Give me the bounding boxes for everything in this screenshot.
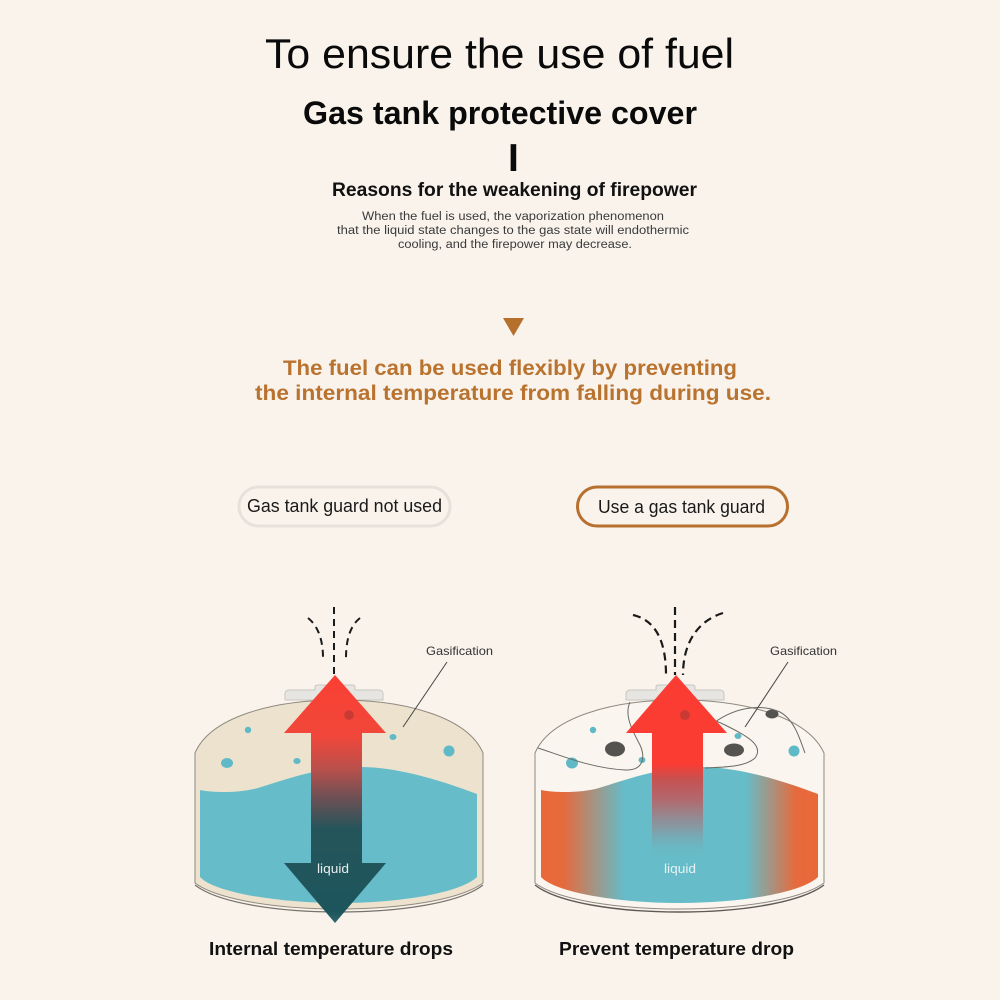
gasification leader xyxy=(745,662,788,727)
label: gasification: Gasification xyxy=(426,644,493,658)
pill: use a gas tank guard: Use a gas tank guard xyxy=(598,497,765,517)
pill: gas tank guard not used: Gas tank guard not used xyxy=(247,496,442,516)
caption: prevent temperature drop: Prevent temperature drop xyxy=(559,939,794,959)
subtitle: Gas tank protective cover xyxy=(303,95,697,131)
icon: down triangle xyxy=(503,318,524,336)
orange callout text: the internal temperature from falling during use. xyxy=(255,382,771,405)
gas bubbles xyxy=(566,727,800,768)
tank body xyxy=(195,700,483,909)
diagram: tank with guard xyxy=(535,607,837,912)
double arrow xyxy=(284,675,386,923)
liquid xyxy=(541,767,818,903)
gasification leader xyxy=(403,662,447,727)
label: gasification: Gasification xyxy=(770,644,837,658)
label: liquid: liquid xyxy=(317,862,349,876)
separator glyph: I xyxy=(508,137,519,180)
dark bubble in arrow xyxy=(680,710,690,720)
gas bubbles xyxy=(221,727,454,768)
tank cap xyxy=(626,685,724,700)
title: To ensure the use of fuel xyxy=(265,30,734,77)
heading: reasons: Reasons for the weakening of firepower xyxy=(332,180,698,201)
vapor dashes xyxy=(633,607,723,675)
dark bubble in arrow xyxy=(344,710,354,720)
explanatory text block: cooling, and the firepower may decrease. xyxy=(398,239,632,251)
caption: internal temperature drops: Internal temperature drops xyxy=(209,939,453,959)
vapor dashes xyxy=(308,607,360,675)
diagram: tank without guard xyxy=(195,607,493,923)
label: liquid: liquid xyxy=(664,862,696,876)
explanatory text block xyxy=(337,211,689,251)
dark gas particles xyxy=(605,710,778,756)
orange callout text: The fuel can be used flexibly by preventing xyxy=(283,357,737,380)
gas motion curves xyxy=(538,702,805,770)
orange callout text xyxy=(255,357,771,405)
pill: use a gas tank guard xyxy=(578,487,788,526)
up arrow xyxy=(626,675,727,860)
liquid xyxy=(200,767,477,903)
explanatory text block: When the fuel is used, the vaporization phenomenon xyxy=(362,211,664,223)
explanatory text block: that the liquid state changes to the gas state will endothermic xyxy=(337,225,689,237)
pill: gas tank guard not used xyxy=(239,487,450,526)
tank base rim xyxy=(195,885,483,912)
tank base rim xyxy=(535,885,824,912)
tank cap xyxy=(285,685,383,700)
tank body xyxy=(535,700,824,909)
